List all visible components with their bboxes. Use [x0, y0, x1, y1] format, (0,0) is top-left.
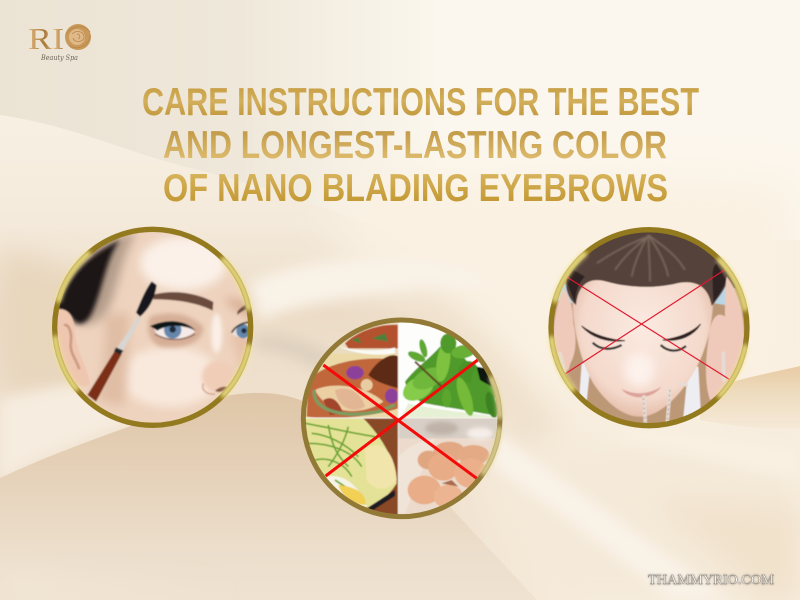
gold ring	[303, 320, 500, 517]
face skin	[77, 232, 248, 422]
water streams	[560, 353, 724, 423]
logo rose icon	[65, 24, 91, 50]
food: green vegetables	[398, 320, 502, 419]
eyebrow	[153, 292, 213, 311]
title line 2: AND LONGEST-LASTING COLOR	[163, 124, 667, 167]
photo backdrop	[554, 280, 744, 423]
logo tagline: Beauty Spa	[40, 53, 78, 62]
tank straps	[579, 363, 701, 417]
photo circle: foods to avoid with red cross	[302, 320, 502, 517]
title line 3: OF NANO BLADING EYEBROWS	[163, 167, 668, 210]
photo circle: eyebrow brushing	[50, 227, 257, 433]
brush	[87, 281, 157, 402]
food: seafood platter	[302, 320, 398, 418]
ear	[57, 309, 90, 386]
hair	[566, 232, 736, 306]
red cross	[565, 270, 729, 379]
right eye	[230, 304, 248, 340]
hands	[554, 288, 576, 371]
eyebrows	[582, 326, 625, 341]
food: eggs	[398, 418, 502, 517]
title	[142, 81, 699, 210]
logo wordmark: RI	[28, 21, 64, 56]
dividers	[302, 320, 502, 517]
logo: RIO Beauty Spa	[28, 21, 91, 62]
face	[572, 279, 714, 418]
watermark: THAMMYRIO.COM: THAMMYRIO.COM	[648, 573, 775, 588]
eyelashes	[593, 343, 686, 351]
hair	[67, 234, 138, 329]
left eye	[150, 321, 196, 339]
nose	[200, 361, 227, 392]
photo circle: face washing with red cross	[547, 227, 753, 430]
food: steamed dish with dill	[302, 418, 398, 517]
gold ring	[551, 230, 747, 426]
lower right silk	[480, 440, 800, 600]
right tan stripe	[700, 366, 800, 429]
gold ring	[55, 229, 251, 425]
tan lower fold	[0, 393, 537, 600]
red cross	[323, 360, 478, 478]
nose and mouth	[624, 353, 654, 387]
